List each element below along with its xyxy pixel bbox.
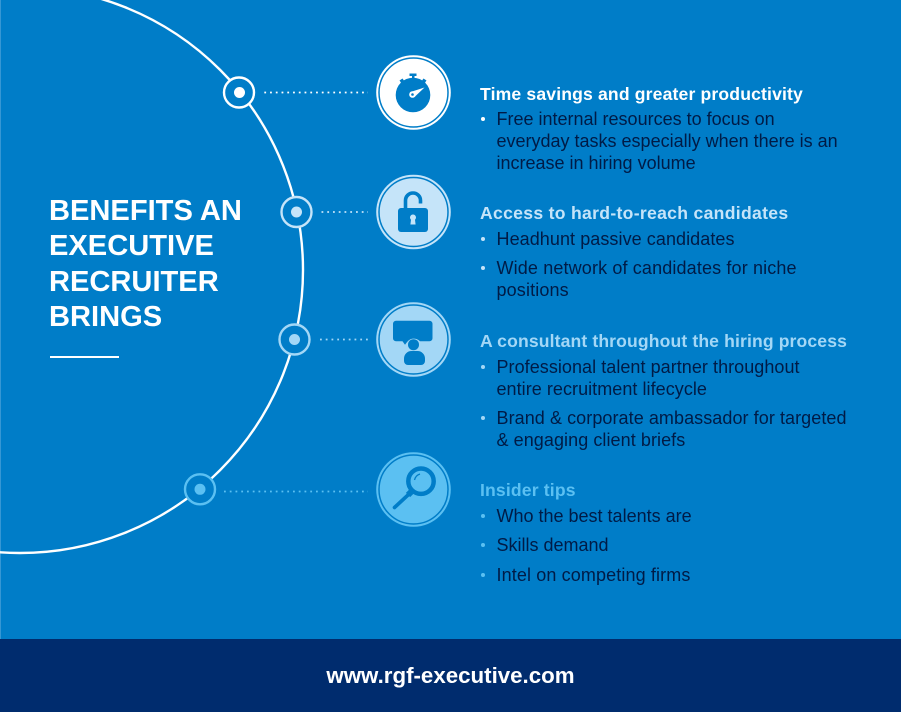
list: insider tips: Intel on competing firms	[496, 565, 690, 585]
list: insider tips	[481, 506, 692, 585]
list: consultant: & engaging client briefs	[496, 430, 685, 450]
icon: consultant with speech bubble	[376, 302, 451, 377]
title: BRINGS	[49, 301, 162, 333]
node 3	[280, 324, 310, 354]
list: access to candidates	[481, 229, 797, 300]
icon: open padlock	[376, 175, 451, 249]
node 4	[185, 474, 215, 504]
heading: insider tips: Insider tips	[480, 480, 576, 500]
large arc	[0, 0, 303, 553]
connector 1	[264, 92, 368, 94]
connector 3	[320, 338, 368, 340]
list: access to candidates: Wide network of candidates for niche	[496, 258, 797, 278]
list: insider tips: Who the best talents are	[496, 506, 692, 526]
heading: access to candidates: Access to hard-to-reach candidates	[480, 203, 788, 223]
title: BENEFITS AN	[49, 195, 242, 227]
list: consultant	[481, 357, 847, 450]
list: consultant: entire recruitment lifecycle	[496, 379, 707, 399]
list: consultant: Professional talent partner throughout	[496, 357, 800, 377]
footer bar	[0, 639, 901, 712]
icon: stopwatch	[376, 55, 451, 130]
node 1	[224, 78, 254, 108]
left edge highlight	[0, 0, 1, 712]
list: time savings	[481, 109, 838, 173]
connector 4	[224, 490, 368, 492]
list: time savings: increase in hiring volume	[496, 153, 696, 173]
list: time savings: everyday tasks especially when there is an	[496, 131, 838, 151]
title underline	[50, 356, 119, 358]
heading: consultant: A consultant throughout the hiring process	[480, 331, 847, 351]
connector 2	[322, 211, 368, 213]
node 2	[282, 197, 312, 227]
list: insider tips: Skills demand	[496, 535, 609, 555]
title: EXECUTIVE	[49, 230, 214, 262]
list: time savings: Free internal resources to focus on	[496, 109, 775, 129]
list: access to candidates: Headhunt passive candidates	[496, 229, 735, 249]
title	[49, 195, 242, 333]
list: access to candidates: positions	[496, 280, 569, 300]
icon: magnifying glass	[376, 452, 451, 527]
list: consultant: Brand & corporate ambassador for targeted	[496, 408, 847, 428]
title: RECRUITER	[49, 266, 219, 298]
website url: www.rgf-executive.com	[326, 663, 575, 688]
heading: time savings: Time savings and greater productivity	[480, 84, 803, 104]
